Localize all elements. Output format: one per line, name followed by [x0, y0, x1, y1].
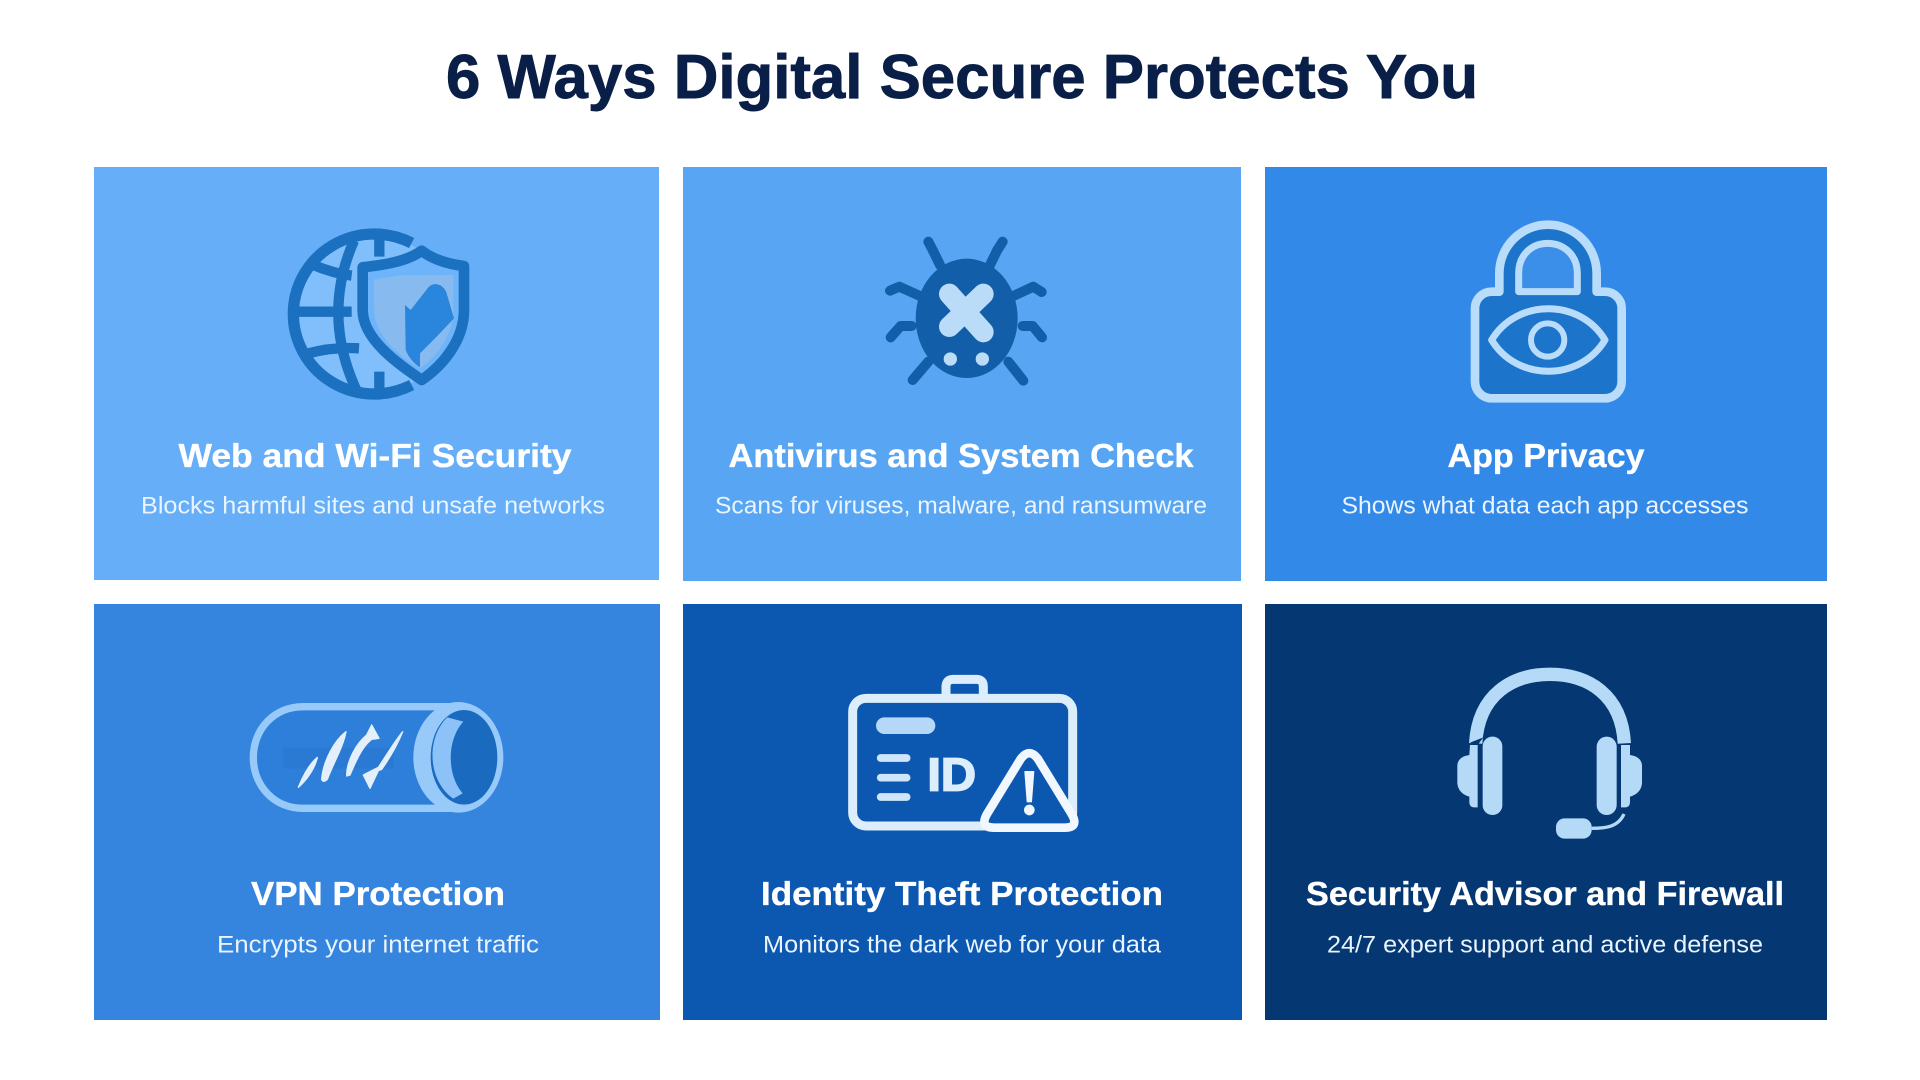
panel: antivirus and system check — [683, 167, 1241, 581]
description: security advisor and firewall: 24/7 expert support and active defense — [1327, 932, 1763, 958]
icon: padlock with eye — [1475, 225, 1622, 398]
icon: bug with cross — [890, 242, 1042, 381]
panel: security advisor and firewall — [1265, 604, 1827, 1020]
description: web and wi-fi security: Blocks harmful sites and unsafe networks — [141, 492, 605, 520]
panel: identity theft protection — [683, 604, 1242, 1020]
heading: security advisor and firewall: Security Advisor and Firewall — [1306, 875, 1784, 912]
description: app privacy: Shows what data each app accesses — [1342, 492, 1748, 520]
description: antivirus and system check: Scans for viruses, malware, and ransumware — [715, 492, 1207, 520]
title: 6 Ways Digital Secure Protects You — [446, 43, 1478, 112]
heading: vpn protection: VPN Protection — [251, 875, 505, 912]
description: vpn protection: Encrypts your internet traffic — [217, 932, 539, 958]
panel: web and wi-fi security — [94, 167, 659, 580]
icon: id badge with warning — [853, 679, 1074, 828]
panel: app privacy — [1265, 167, 1827, 581]
id label: ID — [927, 749, 976, 801]
panel: vpn protection — [94, 604, 660, 1020]
heading: web and wi-fi security: Web and Wi‑Fi Security — [178, 437, 572, 474]
description: identity theft protection: Monitors the dark web for your data — [763, 932, 1162, 958]
heading: identity theft protection: Identity Theft Protection — [761, 875, 1163, 912]
heading: antivirus and system check: Antivirus and System Check — [728, 437, 1194, 474]
icon: headset — [1457, 674, 1642, 839]
icon: vpn tunnel — [253, 702, 503, 813]
heading: app privacy: App Privacy — [1448, 437, 1645, 474]
icon: globe with shield — [293, 234, 464, 394]
